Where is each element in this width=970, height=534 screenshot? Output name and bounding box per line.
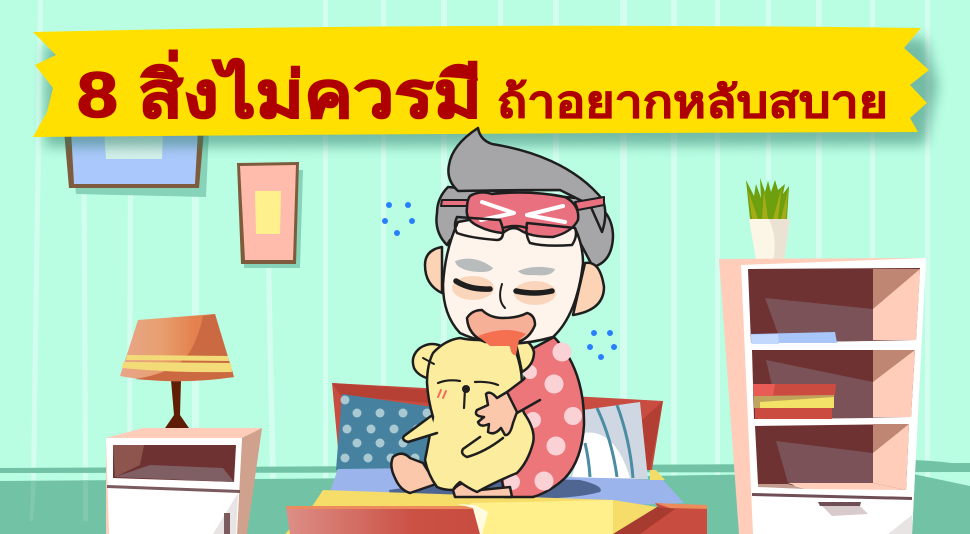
eyebrows and eyes — [452, 259, 556, 308]
title: main: 8 สิ่งไม่ควรมี — [77, 50, 482, 131]
title banner — [33, 26, 929, 137]
bear face — [438, 380, 498, 385]
floor — [0, 460, 970, 534]
arm and hand — [476, 380, 540, 435]
banner shadow — [45, 38, 938, 147]
picture frame: pink — [237, 162, 303, 268]
mouth and drool — [467, 310, 535, 355]
mattress left — [286, 507, 480, 534]
ears — [425, 247, 604, 315]
blue blanket — [325, 468, 684, 505]
lamp base — [163, 380, 191, 431]
bear right arm — [462, 437, 503, 457]
glasses — [455, 217, 576, 246]
shadow — [389, 479, 601, 498]
bed — [285, 383, 707, 534]
top hair — [448, 128, 605, 232]
bookshelf — [719, 258, 926, 534]
sleep mask — [467, 192, 578, 237]
sleep mask strap — [441, 197, 604, 210]
yellow blanket — [285, 490, 657, 534]
pillow: striped — [570, 402, 648, 479]
plant — [746, 178, 790, 260]
drawer — [752, 493, 912, 500]
bear ear right — [515, 339, 534, 372]
bear — [391, 338, 534, 497]
sweat dots: left — [382, 202, 415, 236]
back hair — [436, 187, 613, 267]
bear body — [425, 338, 534, 492]
pillow: blue polka dot — [336, 394, 440, 470]
face — [443, 217, 583, 344]
nightstand — [106, 428, 262, 534]
grass — [746, 178, 789, 219]
top compartment — [748, 268, 920, 343]
lamp — [120, 314, 234, 431]
lamp shade — [120, 314, 234, 381]
bear left arm — [403, 416, 437, 442]
pajama body — [500, 337, 584, 497]
title: secondary: ถ้าอยากหลับสบาย — [497, 78, 888, 127]
sweat dots: right — [587, 330, 617, 360]
character: grandma — [391, 128, 613, 497]
middle compartment — [752, 350, 915, 419]
title text — [77, 50, 888, 131]
bear ear left — [413, 344, 445, 379]
bottom compartment — [755, 424, 909, 490]
books — [753, 384, 836, 396]
bear right foot — [453, 483, 512, 497]
picture frame: blue — [64, 130, 209, 197]
headboard — [332, 383, 663, 470]
mattress right — [620, 503, 707, 534]
pot — [749, 219, 790, 260]
bear left foot — [391, 454, 436, 493]
